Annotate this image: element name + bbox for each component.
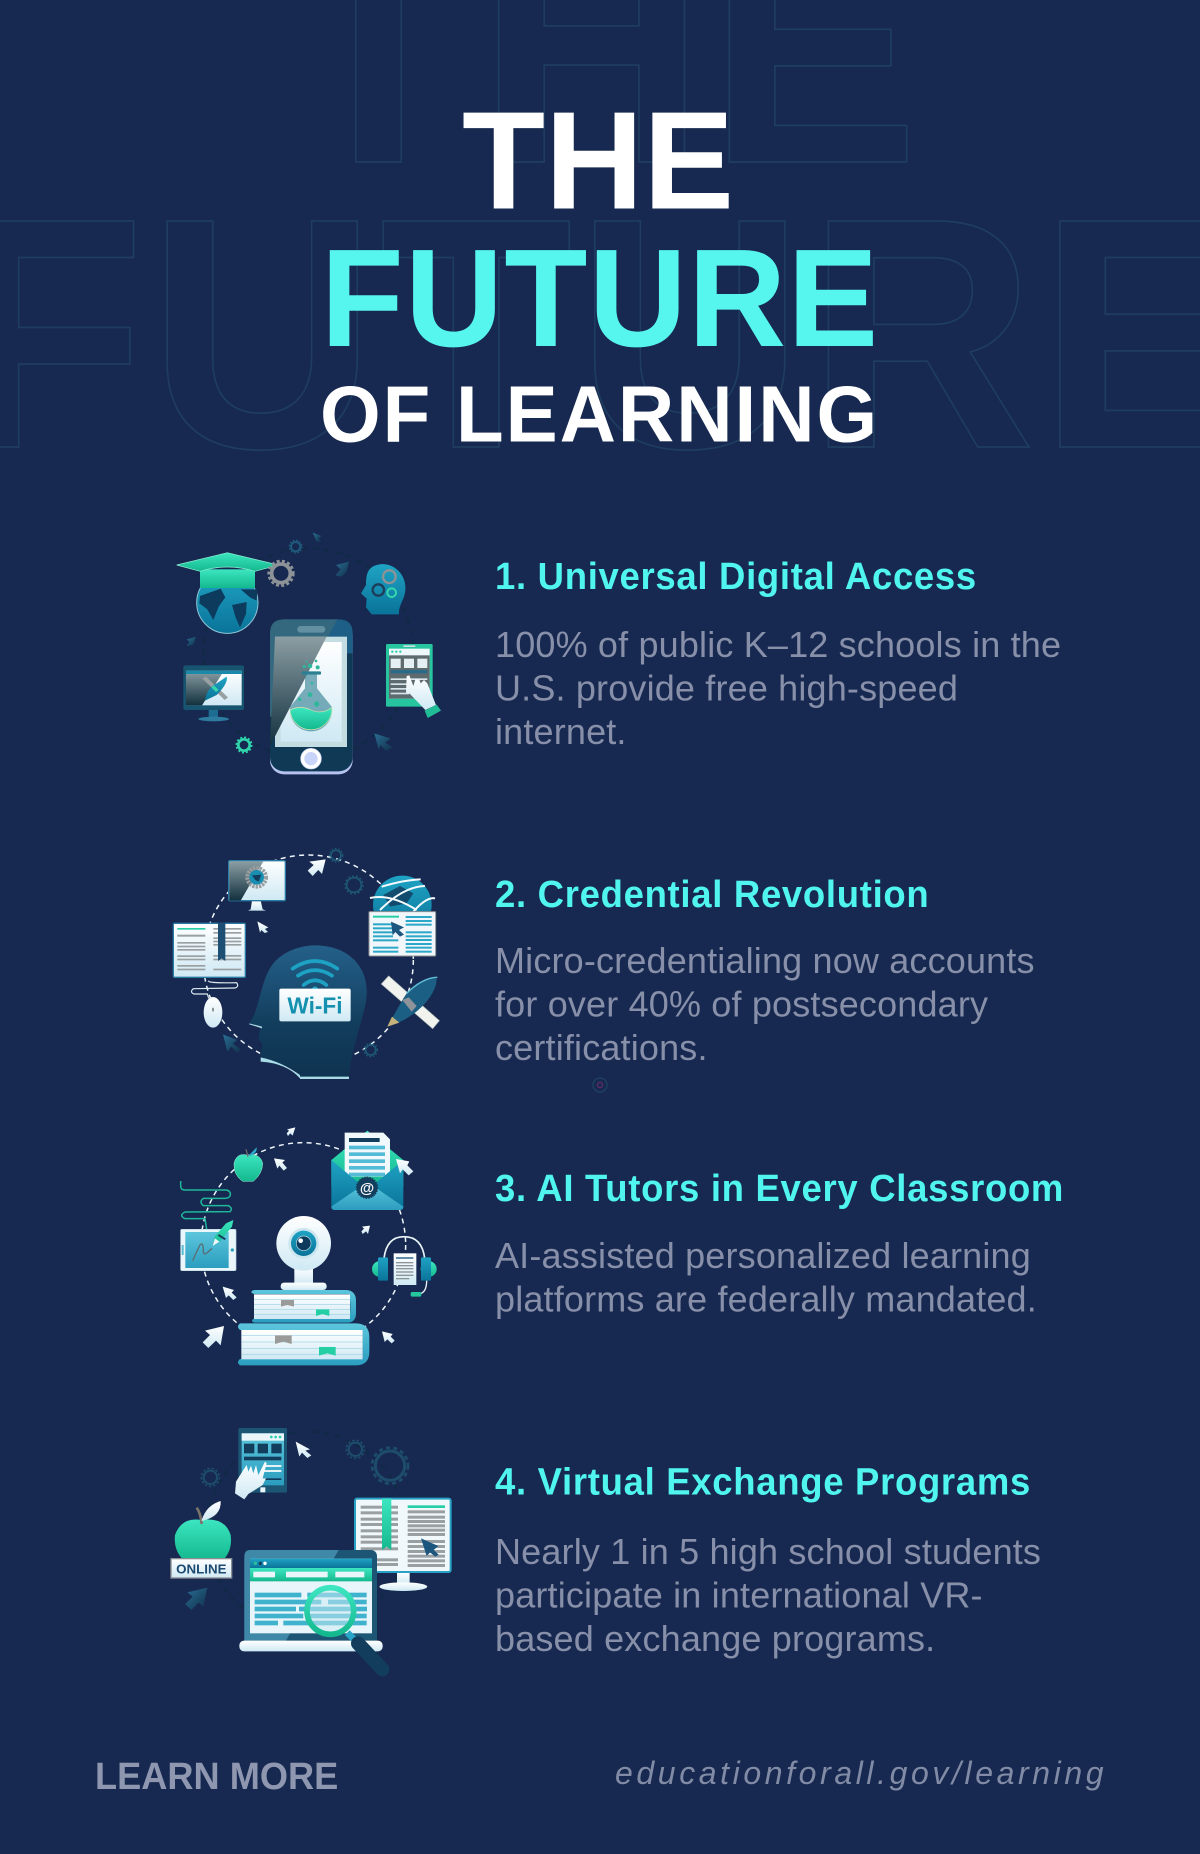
flask <box>290 660 332 731</box>
headset with document <box>372 1237 437 1297</box>
text: item 4: based exchange programs. <box>495 1618 935 1659</box>
footer: url: educationforall.gov/learning <box>615 1755 1107 1791</box>
apple with online label <box>171 1501 232 1578</box>
text: item 2: Micro-credentialing now accounts <box>495 940 1035 981</box>
envelope <box>331 1131 403 1210</box>
apple <box>234 1147 263 1181</box>
globe and web page <box>369 876 436 956</box>
cursor arrows <box>223 859 326 1053</box>
text: item 4: Nearly 1 in 5 high school students <box>495 1531 1041 1572</box>
text: item 2 <box>495 940 1035 1068</box>
mouse <box>191 981 238 1028</box>
heading: item 1: 1. Universal Digital Access <box>495 554 977 597</box>
text: item 3: AI-assisted personalized learning <box>495 1235 1031 1276</box>
desktop monitor with pen and ruler <box>183 665 244 721</box>
computer monitor <box>229 861 285 911</box>
pen and ruler <box>381 976 439 1029</box>
open book with bookmark <box>173 923 245 977</box>
text: item 4 <box>495 1531 1041 1659</box>
faint ring mark <box>593 1078 607 1092</box>
stacked books <box>238 1290 369 1365</box>
icon: webcam and books circle <box>181 1127 437 1365</box>
cursor arrows <box>185 1442 311 1610</box>
text: item 1 <box>495 624 1061 752</box>
heading: item 2: 2. Credential Revolution <box>495 872 929 915</box>
drawing tablet <box>181 1181 236 1271</box>
icon: wi-fi head circle <box>173 849 439 1079</box>
envelope: @ <box>360 1181 374 1197</box>
tablet with hand <box>235 1428 287 1499</box>
phone <box>270 619 353 774</box>
text: item 1: internet. <box>495 711 627 752</box>
head with wi-fi <box>249 945 367 1079</box>
title <box>320 83 879 459</box>
text: item 4: participate in international VR- <box>495 1574 983 1616</box>
cursor arrows <box>187 533 393 751</box>
heading: item 4: 4. Virtual Exchange Programs <box>495 1460 1031 1503</box>
title: THE <box>462 83 734 239</box>
head with gears <box>361 564 405 614</box>
text: item 3 <box>495 1235 1037 1320</box>
laptop <box>239 1550 383 1651</box>
gears <box>329 849 377 1057</box>
globe with graduation cap <box>177 553 278 633</box>
text: item 2: for over 40% of postsecondary <box>495 984 988 1024</box>
footer: learn more: LEARN MORE <box>95 1754 338 1797</box>
tablet with hand <box>386 644 441 718</box>
wi-fi label: Wi-Fi <box>287 992 343 1018</box>
title: FUTURE <box>321 220 879 376</box>
webcam <box>276 1216 331 1290</box>
magnifying glass <box>307 1588 382 1669</box>
gears <box>236 540 302 753</box>
heading: item 3: 3. AI Tutors in Every Classroom <box>495 1166 1064 1209</box>
icon: online learning circle <box>171 1428 451 1669</box>
book on monitor <box>355 1499 451 1591</box>
title: OF LEARNING <box>320 370 879 459</box>
icon: digital access phone circle <box>177 533 441 774</box>
apple with online label: ONLINE <box>176 1561 227 1576</box>
text: item 1: U.S. provide free high-speed <box>495 668 958 708</box>
gears <box>201 1440 408 1486</box>
text: item 3: platforms are federally mandated. <box>495 1278 1037 1320</box>
text: item 1: 100% of public K–12 schools in the <box>495 624 1061 665</box>
cursor arrows <box>203 1127 413 1348</box>
text: item 2: certifications. <box>495 1027 708 1068</box>
